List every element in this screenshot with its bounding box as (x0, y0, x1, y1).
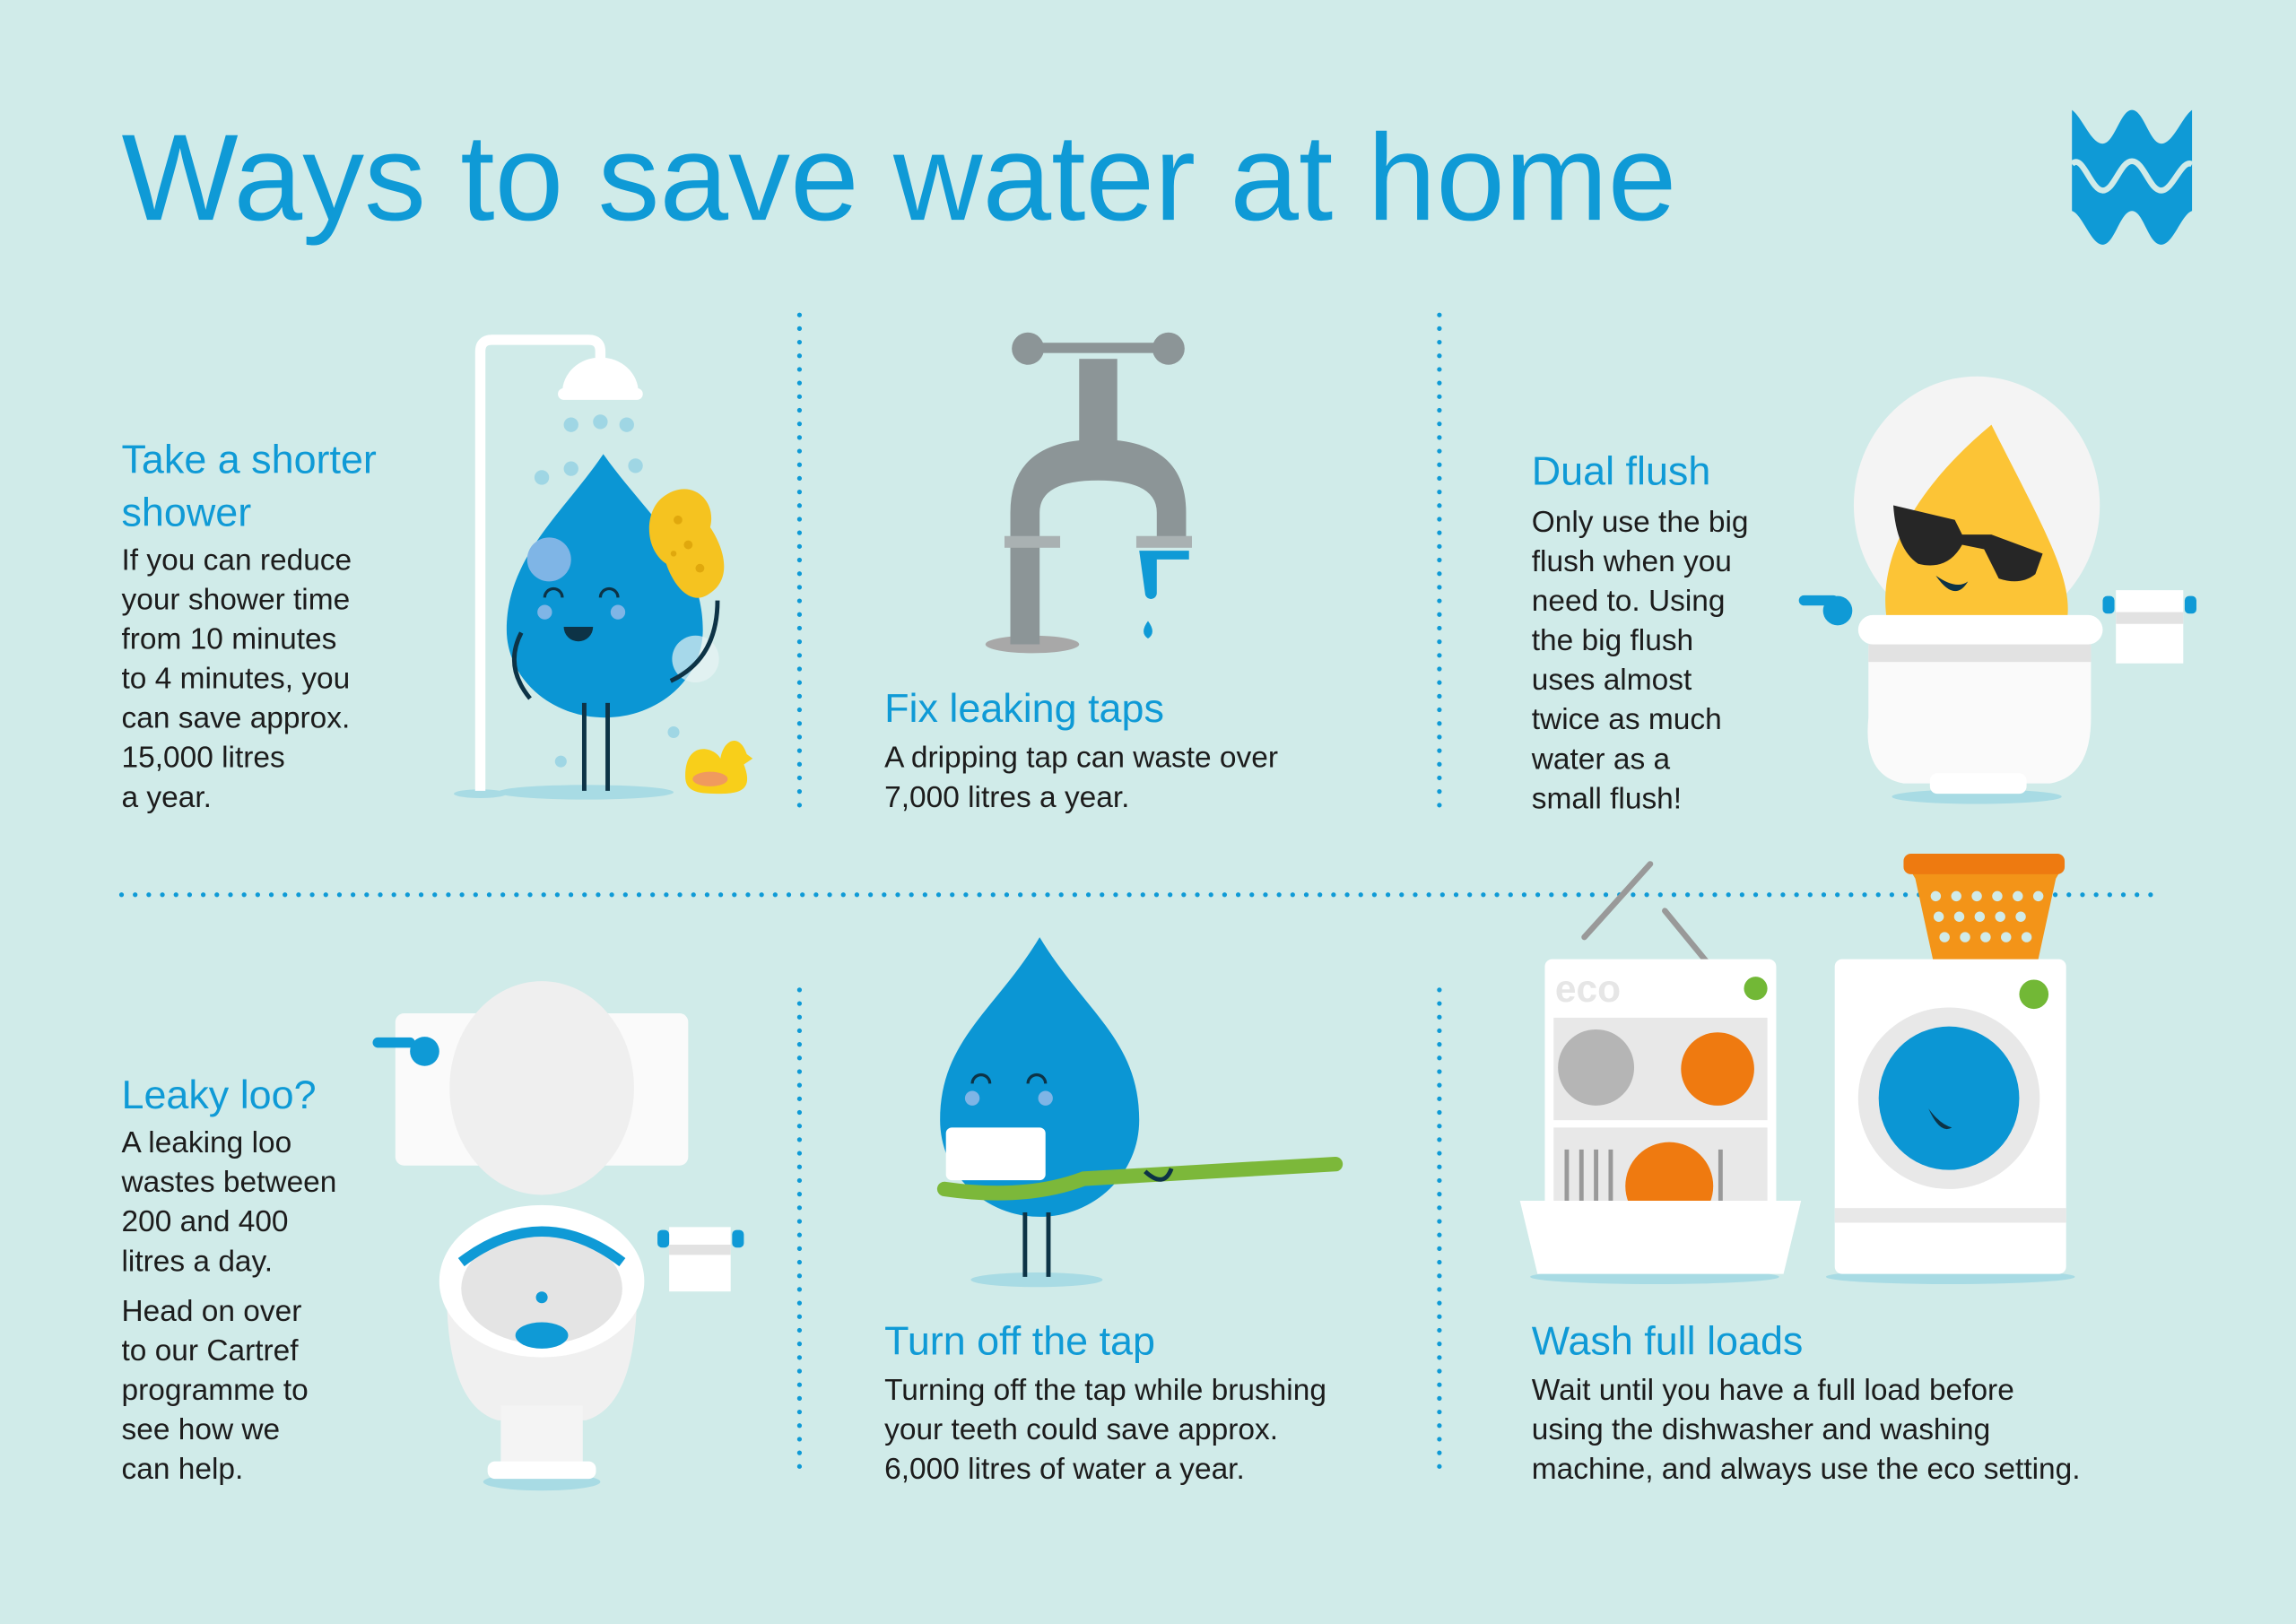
heading: Dual flush (1532, 448, 1710, 494)
text block: Wait until you have a full load before (1532, 1374, 2014, 1407)
text block: Only use the big (1532, 506, 1749, 539)
title: Ways to save water at home (122, 109, 1676, 247)
text block: see how we (122, 1413, 280, 1446)
text block: from 10 minutes (122, 622, 336, 656)
heading: shower (122, 489, 251, 534)
text block: twice as much (1532, 703, 1722, 736)
text block: need to. Using (1532, 585, 1725, 618)
text block: can save approx. (122, 702, 350, 735)
text block: wastes between (121, 1166, 336, 1199)
icon: dishwasher and washing machine (1520, 854, 2074, 1284)
icon: logo (2072, 110, 2192, 245)
text block: water as a (1531, 743, 1670, 776)
heading: Wash full loads (1532, 1317, 1803, 1363)
text block: litres a day. (122, 1245, 273, 1278)
text block: uses almost (1532, 664, 1692, 697)
text block: your teeth could save approx. (884, 1413, 1278, 1446)
panel: turn off the tap (884, 937, 1335, 1486)
panel: wash full loads (1520, 854, 2081, 1486)
text block: programme to (122, 1374, 309, 1407)
text block: Head on over (122, 1295, 301, 1328)
heading: Turn off the tap (884, 1317, 1155, 1363)
text block: If you can reduce (122, 543, 352, 577)
text block: 15,000 litres (122, 742, 285, 775)
text block: 7,000 litres a year. (884, 781, 1129, 814)
icon: shower with drop (454, 340, 752, 800)
text block: 200 and 400 (122, 1205, 289, 1238)
text block: machine, and always use the eco setting. (1532, 1453, 2081, 1486)
text block: your shower time (122, 583, 350, 616)
text block: to our Cartref (122, 1334, 299, 1368)
text block: A dripping tap can waste over (884, 742, 1278, 775)
text block: can help. (122, 1453, 243, 1486)
icon: leaky toilet (378, 981, 744, 1490)
text block: a year. (122, 781, 212, 814)
icon: dishwasher and washing machine: eco (1555, 968, 1621, 1010)
panel: dual flush (1531, 377, 2196, 815)
icon: toilet with sunglasses drop (1804, 377, 2196, 804)
text block: A leaking loo (122, 1126, 291, 1159)
text block: 6,000 litres of water a year. (884, 1453, 1245, 1486)
icon: drop brushing teeth (940, 937, 1335, 1287)
heading: Take a shorter (122, 437, 377, 482)
heading: Leaky loo? (122, 1072, 317, 1117)
text block: small flush! (1532, 782, 1682, 815)
text block: to 4 minutes, you (122, 663, 350, 696)
text block: flush when you (1532, 545, 1732, 578)
panel: shorter shower (122, 340, 752, 814)
heading: Fix leaking taps (884, 685, 1164, 731)
text block: using the dishwasher and washing (1532, 1413, 1990, 1446)
panel: leaking taps (884, 333, 1278, 814)
icon: tap (986, 333, 1192, 653)
text block: the big flush (1532, 624, 1693, 657)
panel: leaky loo (121, 981, 744, 1490)
text block: Turning off the tap while brushing (884, 1374, 1326, 1407)
